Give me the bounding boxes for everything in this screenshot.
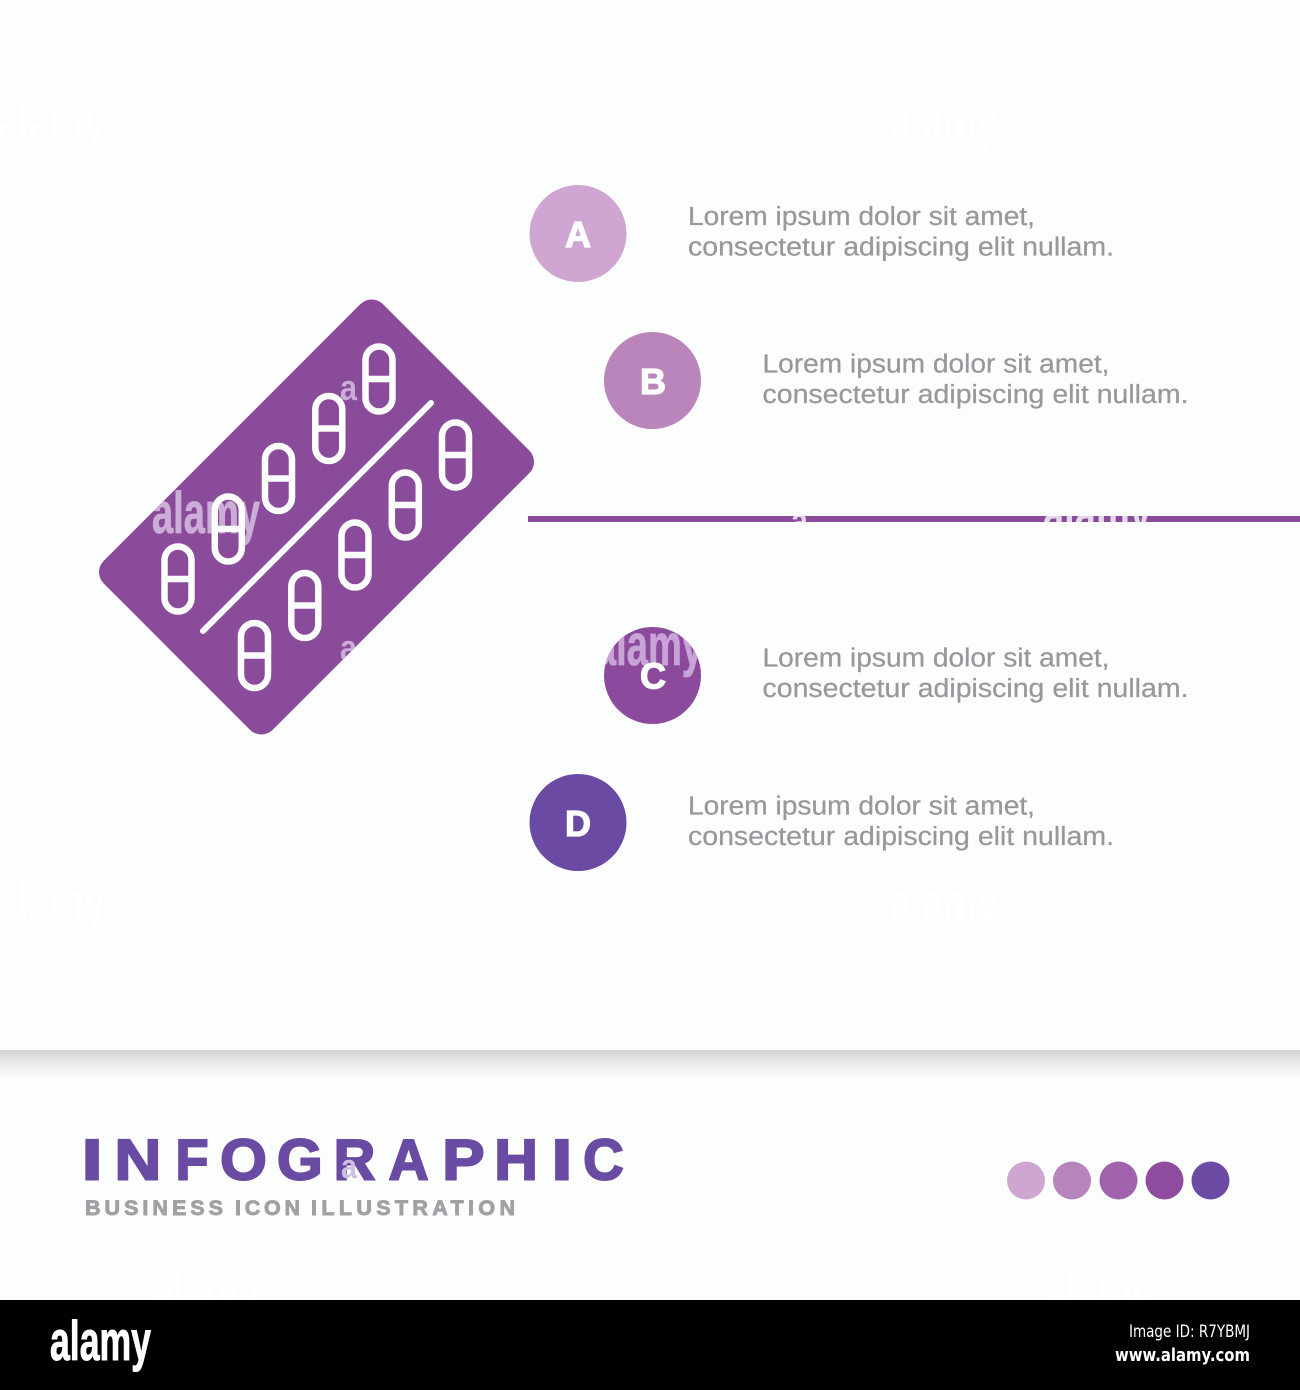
- step A: consectetur adipiscing elit nullam.: [688, 234, 1114, 262]
- title: INFOGRAPHIC: O: [220, 1128, 267, 1192]
- site url: www.alamy.com: [1115, 1345, 1250, 1366]
- title: INFOGRAPHIC: C: [583, 1128, 624, 1192]
- step D: [530, 774, 1114, 871]
- step C: alamy: [595, 613, 703, 678]
- title: INFOGRAPHIC: G: [277, 1128, 323, 1192]
- step A: [530, 185, 1114, 282]
- image id: Image ID: R7YBMJ: [1129, 1322, 1250, 1342]
- background watermarks: alamy: [0, 90, 105, 155]
- watermark on icon: alamy: [152, 481, 260, 546]
- title: INFOGRAPHIC: F: [176, 1128, 208, 1192]
- step D: consectetur adipiscing elit nullam.: [688, 823, 1114, 851]
- title: INFOGRAPHIC: I: [82, 1128, 103, 1192]
- divider inside pack: [203, 403, 431, 631]
- title: INFOGRAPHIC: R: [334, 1128, 375, 1192]
- horizontal connector line: alamy: [1043, 481, 1151, 546]
- step C: consectetur adipiscing elit nullam.: [762, 675, 1188, 703]
- alamy logo: alamy: [50, 1309, 151, 1372]
- step B: Lorem ipsum dolor sit amet,: [762, 350, 1110, 378]
- lower row of pills: [241, 422, 469, 688]
- step A: Lorem ipsum dolor sit amet,: [688, 203, 1035, 231]
- background watermarks: alamy: [152, 1260, 260, 1325]
- step C: C: [640, 656, 666, 696]
- title: INFOGRAPHIC: H: [494, 1128, 538, 1192]
- step B: B: [640, 361, 666, 402]
- subtitle: ICON: [235, 1196, 300, 1220]
- background watermarks: alamy: [0, 870, 105, 935]
- step B: consectetur adipiscing elit nullam.: [762, 381, 1188, 409]
- watermark on icon: a: [340, 367, 358, 408]
- horizontal connector line: a: [791, 500, 809, 541]
- watermark on icon: a: [340, 627, 358, 668]
- subtitle: [85, 1196, 515, 1220]
- title: INFOGRAPHIC: I: [551, 1128, 572, 1192]
- step C: Lorem ipsum dolor sit amet,: [762, 644, 1110, 672]
- footer shadow band: [0, 1050, 1300, 1078]
- title: INFOGRAPHIC: [82, 1128, 624, 1192]
- subtitle: BUSINESS: [85, 1196, 223, 1220]
- watermark bar: [0, 1300, 1300, 1390]
- horizontal connector line: [528, 516, 1300, 522]
- step C: [604, 627, 1186, 724]
- watermark on icon: [152, 367, 358, 668]
- background watermarks: alamy: [890, 90, 998, 155]
- title: INFOGRAPHIC: A: [389, 1128, 429, 1192]
- icon: blister pack of pills: [92, 293, 541, 741]
- title: INFOGRAPHIC: N: [114, 1128, 161, 1192]
- palette dots: [1007, 1162, 1230, 1200]
- background watermarks: alamy: [1045, 1260, 1153, 1325]
- step D: Lorem ipsum dolor sit amet,: [688, 792, 1035, 820]
- background watermarks: alamy: [890, 870, 998, 935]
- watermark letter on title: a: [341, 1148, 358, 1186]
- step B: [604, 332, 1188, 429]
- subtitle: ILLUSTRATION: [311, 1196, 515, 1220]
- step D: D: [565, 803, 591, 844]
- background watermarks: [0, 90, 1153, 1325]
- title: INFOGRAPHIC: P: [442, 1128, 485, 1192]
- step A: A: [565, 214, 591, 255]
- upper row of pills: [164, 346, 392, 612]
